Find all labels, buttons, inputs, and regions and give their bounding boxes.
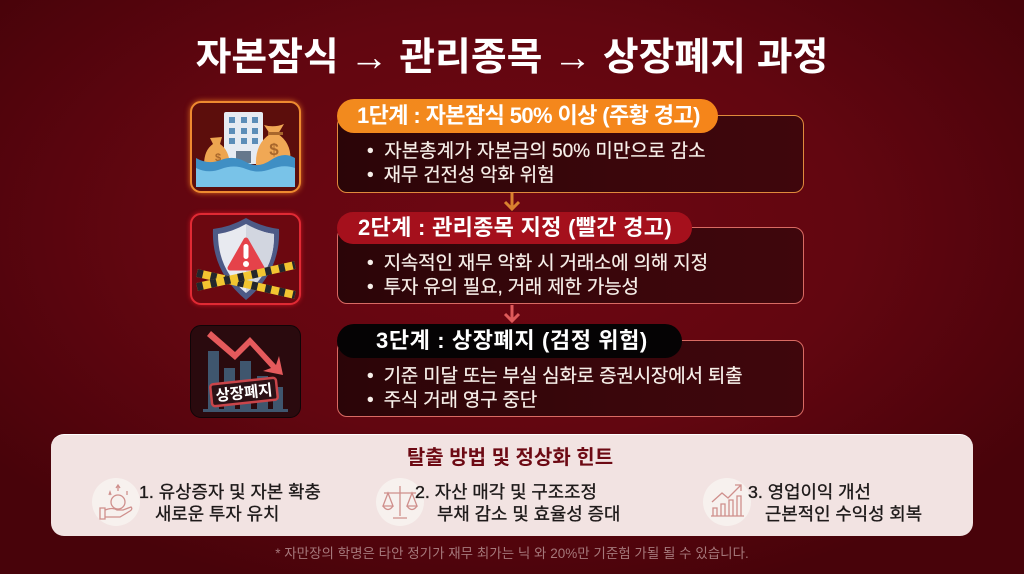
icon: warning shield with tape bbox=[190, 213, 301, 305]
icon: falling chart with delisting label: 상장폐지 bbox=[215, 381, 273, 405]
icon: rising chart bbox=[703, 478, 751, 526]
icon: money in hand bbox=[92, 478, 140, 526]
icon: building and money bags in flood bbox=[190, 101, 301, 193]
stage 2 heading: 2단계 : 관리종목 지정 (빨간 경고) bbox=[358, 215, 672, 240]
panel: stage 2 bbox=[337, 227, 804, 304]
title: 자본잠식 → 관리종목 → 상장폐지 과정 bbox=[196, 36, 828, 79]
panel: stage 1 bbox=[337, 115, 804, 193]
panel: stage 3 bbox=[337, 340, 804, 417]
icon: balance scale bbox=[376, 478, 424, 526]
stage 3 heading: 3단계 : 상장폐지 (검정 위험) bbox=[376, 328, 648, 353]
stage 3 bullets: • 주식 거래 영구 중단 bbox=[367, 390, 537, 410]
tips heading: 탈출 방법 및 정상화 힌트 bbox=[407, 447, 613, 469]
tip 3 bbox=[748, 482, 922, 524]
stage 1 bullets bbox=[367, 141, 706, 186]
stage 3 heading bbox=[337, 324, 682, 358]
stage 2 heading bbox=[337, 212, 692, 244]
tip 2: 2. 자산 매각 및 구조조정 bbox=[415, 482, 597, 502]
stage 2 bullets: • 투자 유의 필요, 거래 제한 가능성 bbox=[367, 276, 639, 298]
tip 3: 근본적인 수익성 회복 bbox=[765, 504, 922, 524]
stage 3 bullets bbox=[367, 366, 742, 410]
icon: falling chart with delisting label bbox=[190, 325, 301, 418]
stage 1 bullets: • 재무 건전성 악화 위험 bbox=[367, 164, 554, 186]
tip 2: 부채 감소 및 효율성 증대 bbox=[437, 504, 620, 524]
stage 2 bullets bbox=[367, 253, 708, 298]
tip 2 bbox=[415, 482, 620, 524]
stage 1 heading bbox=[337, 99, 718, 133]
tip 1: 1. 유상증자 및 자본 확충 bbox=[139, 482, 321, 502]
arrow 1 bbox=[504, 193, 520, 211]
icon: building and money bags in flood: $ bbox=[215, 152, 221, 164]
panel: escape tips bbox=[51, 434, 973, 536]
stage 3 bullets: • 기준 미달 또는 부실 심화로 증권시장에서 퇴출 bbox=[367, 366, 742, 387]
icon: building and money bags in flood: $ bbox=[269, 140, 279, 159]
stage 1 bullets: • 자본총계가 자본금의 50% 미만으로 감소 bbox=[367, 141, 706, 162]
arrow 2 bbox=[504, 305, 520, 323]
tip 1: 새로운 투자 유치 bbox=[155, 504, 279, 524]
tip 1 bbox=[139, 482, 321, 524]
tip 3: 3. 영업이익 개선 bbox=[748, 482, 871, 502]
footnote: * 자만장의 학명은 타안 정기가 재무 최가는 닉 와 20%만 기준험 가될 될 수 있습니다. bbox=[275, 546, 749, 561]
stage 1 heading: 1단계 : 자본잠식 50% 이상 (주황 경고) bbox=[357, 103, 700, 128]
stage 2 bullets: • 지속적인 재무 악화 시 거래소에 의해 지정 bbox=[367, 253, 708, 274]
